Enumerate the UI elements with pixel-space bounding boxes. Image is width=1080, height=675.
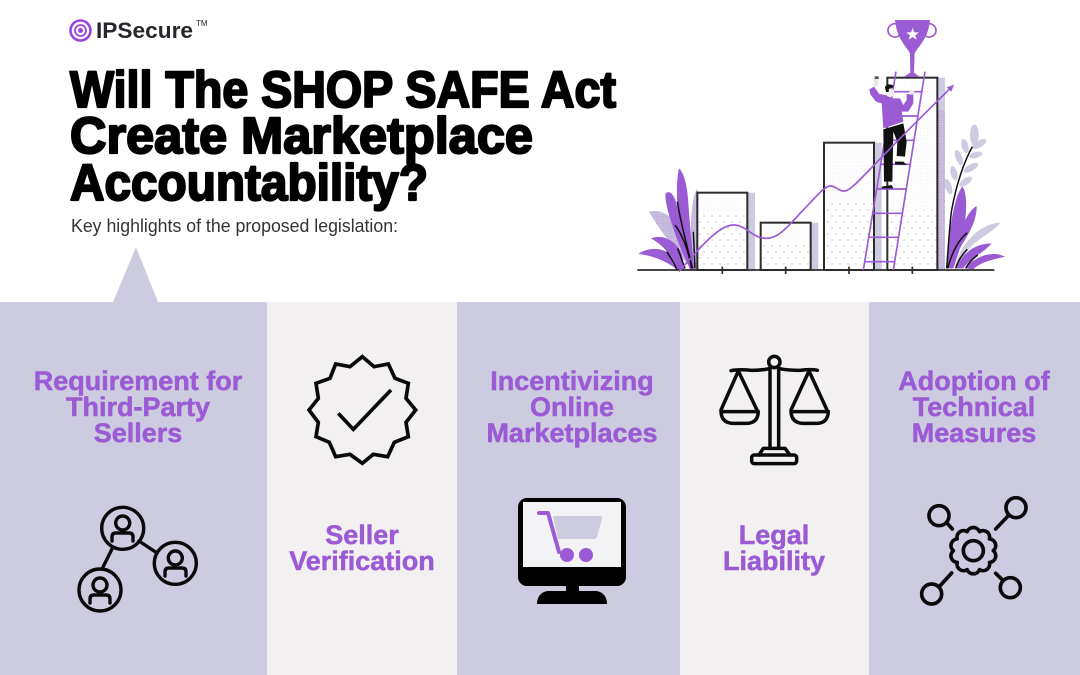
logo: IPSecure: TM [196,19,208,28]
title [70,61,616,211]
heading: legal liability: Legal [739,520,809,550]
illustration: growth chart with climber and trophy [637,20,1005,274]
panel: incentivizing online marketplaces [457,302,680,675]
panel: legal liability [680,302,869,675]
heading: requirement for third-party sellers: Sellers [94,418,182,448]
heading: requirement for third-party sellers: Requirement for [34,366,243,396]
heading: seller verification: Verification [289,546,435,576]
bar 2 [761,223,818,270]
title: Create Marketplace [70,107,533,164]
plant: right [942,124,1005,269]
heading: legal liability: Liability [723,546,825,576]
bar 3 [824,143,882,270]
heading: incentivizing online marketplaces: Online [530,392,614,422]
panel: adoption of technical measures [869,302,1080,675]
pointer triangle [113,247,158,302]
plant: left [638,168,701,270]
trend arrow [679,85,954,271]
heading: seller verification: Seller [325,520,399,550]
icon: verified badge with check [309,357,416,463]
heading: incentivizing online marketplaces: Marketplaces [486,418,658,448]
branch leaves [942,124,988,195]
heading: adoption of technical measures: Measures [912,418,1036,448]
climber figure [869,76,914,188]
bar 1 [697,193,755,270]
title: Will The SHOP SAFE Act [70,61,616,118]
trophy [888,20,936,77]
axis [637,267,994,274]
heading: incentivizing online marketplaces: Incentivizing [490,366,654,396]
ladder [863,72,925,270]
cart handle [539,513,559,552]
title: Accountability? [70,154,428,211]
cart basket [553,516,602,539]
icon: scales of justice [721,356,828,464]
panel: requirement for third-party sellers [0,247,267,675]
icon: logo target [70,20,90,40]
logo: IPSecure: IPSecure [96,18,193,43]
heading: adoption of technical measures: Adoption of [898,366,1051,396]
heading: requirement for third-party sellers: Third-Party [66,392,210,422]
bar 4 [887,78,945,270]
icon: monitor with shopping cart [518,498,626,604]
icon: gear with connected nodes [922,498,1026,604]
panel: seller verification [267,302,457,675]
subtitle: Key highlights of the proposed legislation: [71,216,398,236]
bar chart [697,78,945,270]
icon: connected people network [79,507,196,611]
logo: IPSecure [70,18,208,43]
heading: adoption of technical measures: Technical [913,392,1035,422]
